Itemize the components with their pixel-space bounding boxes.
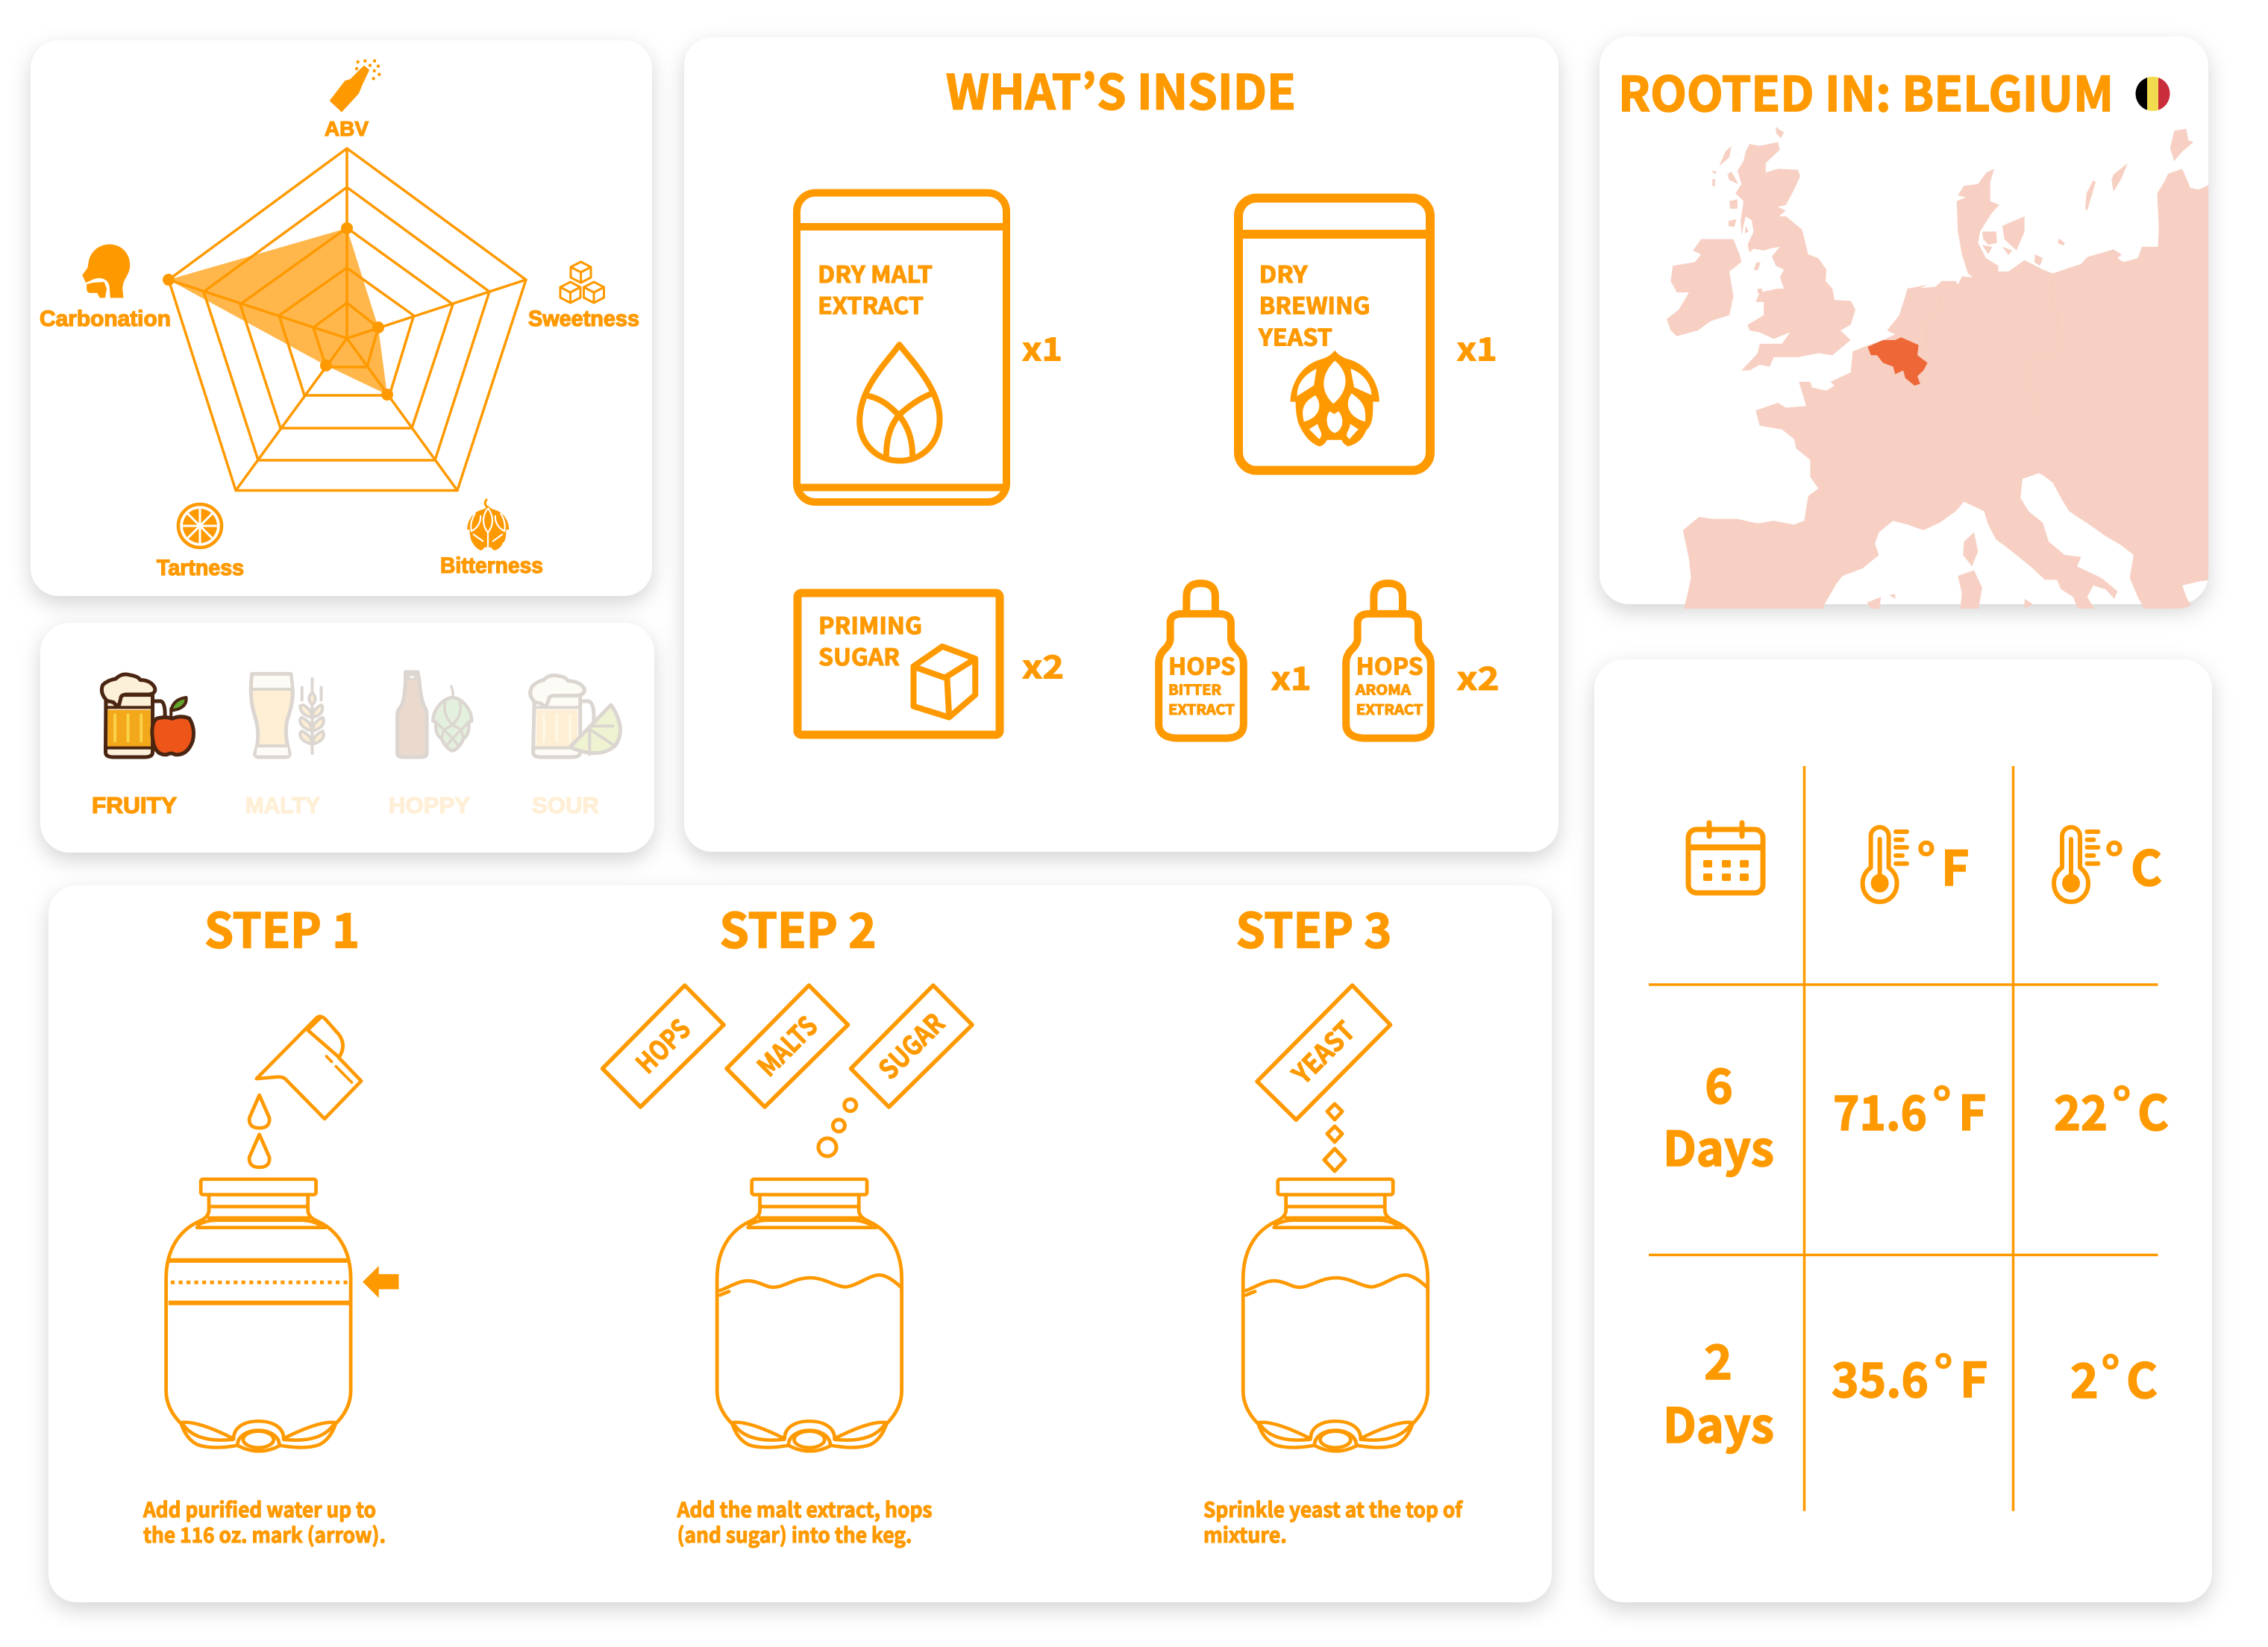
heading: rooted in Belgium: ROOTED IN: BELGIUM xyxy=(1618,57,2114,125)
item: hops aroma extract bottle: EXTRACT xyxy=(1356,699,1423,719)
heading: step 2: STEP 2 xyxy=(719,894,876,962)
cell: 22 C: 22 xyxy=(2054,1076,2108,1144)
label: Tartness: Tartness xyxy=(157,556,244,580)
item: priming sugar box xyxy=(798,593,1000,735)
heading: step 1: STEP 1 xyxy=(204,894,360,962)
icon: keg with liquid xyxy=(717,1179,902,1451)
icon: calendar xyxy=(1688,823,1763,893)
label: MALTY: MALTY xyxy=(245,792,320,818)
icon: sugar packet xyxy=(850,985,972,1107)
header: degrees Fahrenheit: ° xyxy=(1917,824,1936,892)
text: step 3 description: mixture. xyxy=(1203,1519,1287,1549)
item: dry brewing yeast bag: DRY xyxy=(1259,256,1309,289)
icon: Belgian flag xyxy=(2135,76,2171,112)
icon: hop cone xyxy=(467,500,509,550)
item: hops aroma extract bottle: AROMA xyxy=(1355,680,1412,700)
radar chart xyxy=(163,148,526,491)
label: Sweetness: Sweetness xyxy=(528,307,639,331)
cell: 6 days xyxy=(1663,1049,1774,1180)
text: step 2 description: (and sugar) into the keg. xyxy=(677,1519,912,1549)
icon: hops packet xyxy=(603,985,724,1107)
item: priming sugar box: PRIMING xyxy=(818,607,922,641)
cell: 22 C xyxy=(2054,1068,2169,1144)
item: hops bitter extract bottle: EXTRACT xyxy=(1168,699,1235,719)
header: degrees Celsius xyxy=(2054,824,2162,902)
panel: fermentation table xyxy=(1594,659,2212,1602)
cell: 71.6 F: ° xyxy=(1932,1068,1952,1137)
item: hops bitter extract bottle xyxy=(1159,583,1244,738)
label: Bitterness: Bitterness xyxy=(440,553,543,578)
icon: malts packet: MALTS xyxy=(748,1006,825,1084)
cell: 71.6 F: F xyxy=(1958,1076,1986,1144)
text: step 1 description: the 116 oz. mark (arrow). xyxy=(143,1519,386,1549)
label: FRUITY: FRUITY xyxy=(92,792,177,818)
item: dry brewing yeast bag xyxy=(1238,198,1430,471)
cell: 2 C xyxy=(2070,1337,2158,1412)
header: degrees Fahrenheit xyxy=(1863,824,1969,902)
arrow: fill level xyxy=(363,1266,399,1298)
panel: beer style xyxy=(40,623,654,853)
cell: 2 days xyxy=(1663,1325,1774,1457)
icon: sour beer and lime xyxy=(530,675,620,757)
item: priming sugar box: SUGAR xyxy=(818,639,900,672)
icon: measuring jug with drops xyxy=(249,1017,361,1167)
icon: keg with fill mark xyxy=(166,1179,351,1451)
cell: 35.6 F: 35.6 xyxy=(1832,1343,1929,1411)
label: HOPPY: HOPPY xyxy=(389,792,470,818)
item: dry malt extract bag: EXTRACT xyxy=(818,287,924,321)
cell: 35.6 F: ° xyxy=(1934,1336,1953,1405)
icon: yeast packet: YEAST xyxy=(1282,1011,1362,1092)
icon: ABV bottle xyxy=(331,60,380,111)
header: degrees Celsius: ° xyxy=(2105,824,2124,892)
text: step 3 description: Sprinkle yeast at the top of xyxy=(1203,1494,1463,1524)
item: hops aroma extract bottle: HOPS xyxy=(1356,647,1423,682)
text: step 1 description: Add purified water up to xyxy=(142,1494,376,1524)
icon: fruity beer and apple xyxy=(101,674,194,757)
quantity: aroma x2: x2 xyxy=(1457,653,1500,700)
item: dry brewing yeast bag: YEAST xyxy=(1258,319,1332,353)
text: step 2 description: Add the malt extract, hops xyxy=(677,1494,933,1524)
item: hops aroma extract bottle xyxy=(1346,583,1431,738)
header: degrees Fahrenheit: F xyxy=(1941,831,1969,900)
cell: 2 C: ° xyxy=(2101,1337,2120,1405)
item: hops bitter extract bottle: HOPS xyxy=(1168,647,1235,682)
icon: falling yeast granules xyxy=(1324,1104,1345,1171)
quantity: sugar x2: x2 xyxy=(1022,642,1064,688)
cell: 35.6 F xyxy=(1832,1336,1987,1411)
label: SOUR: SOUR xyxy=(532,792,599,818)
quantity: malt x1: x1 xyxy=(1022,324,1062,371)
quantity: bitter x1: x1 xyxy=(1271,653,1312,700)
icon: yeast packet xyxy=(1257,985,1391,1120)
icon: malts packet xyxy=(727,985,848,1107)
item: dry brewing yeast bag: BREWING xyxy=(1259,287,1370,321)
cell: 6 days: Days xyxy=(1663,1111,1774,1180)
cell: 35.6 F: F xyxy=(1960,1343,1987,1411)
item: dry malt extract bag xyxy=(797,192,1006,502)
icon: hops packet: HOPS xyxy=(626,1009,698,1081)
cell: 71.6 F xyxy=(1833,1068,1986,1144)
icon: sugar cubes xyxy=(560,262,604,303)
item: hops bitter extract bottle: BITTER xyxy=(1168,680,1221,700)
cell: 2 days: Days xyxy=(1663,1388,1774,1457)
text: step 1 description xyxy=(142,1494,386,1549)
cell: 2 days: 2 xyxy=(1704,1325,1732,1393)
map of western Europe xyxy=(1667,127,2211,612)
cell: 71.6 F: 71.6 xyxy=(1833,1076,1927,1144)
heading: what's inside: WHAT’S INSIDE xyxy=(946,55,1296,124)
quantity: yeast x1: x1 xyxy=(1457,324,1497,371)
label: ABV: ABV xyxy=(325,117,369,140)
cell: 2 C: C xyxy=(2126,1343,2158,1412)
icon: malty pint and wheat xyxy=(251,674,324,757)
panel: brewing steps xyxy=(48,885,1552,1602)
icon: citrus slice xyxy=(178,504,222,548)
cell: 22 C: C xyxy=(2137,1076,2169,1144)
heading: step 3: STEP 3 xyxy=(1235,894,1392,962)
panel: flavour radar xyxy=(31,40,652,596)
panel: rooted in Belgium xyxy=(1600,37,2211,612)
icon: falling bubbles xyxy=(818,1099,856,1156)
icon: head and throat xyxy=(82,244,130,298)
cell: 22 C: ° xyxy=(2112,1068,2131,1137)
icon: hoppy bottle and hop xyxy=(398,672,472,757)
item: dry malt extract bag: DRY MALT xyxy=(818,256,933,289)
text: step 2 description xyxy=(677,1494,933,1549)
cell: 6 days: 6 xyxy=(1705,1049,1733,1117)
text: step 3 description xyxy=(1203,1494,1463,1549)
header: degrees Celsius: C xyxy=(2131,831,2162,900)
label: Carbonation: Carbonation xyxy=(40,307,171,331)
icon: keg with liquid and yeast xyxy=(1243,1179,1428,1451)
cell: 2 C: 2 xyxy=(2070,1343,2099,1412)
panel: what's inside xyxy=(684,37,1559,852)
icon: sugar packet: SUGAR xyxy=(869,1003,952,1087)
